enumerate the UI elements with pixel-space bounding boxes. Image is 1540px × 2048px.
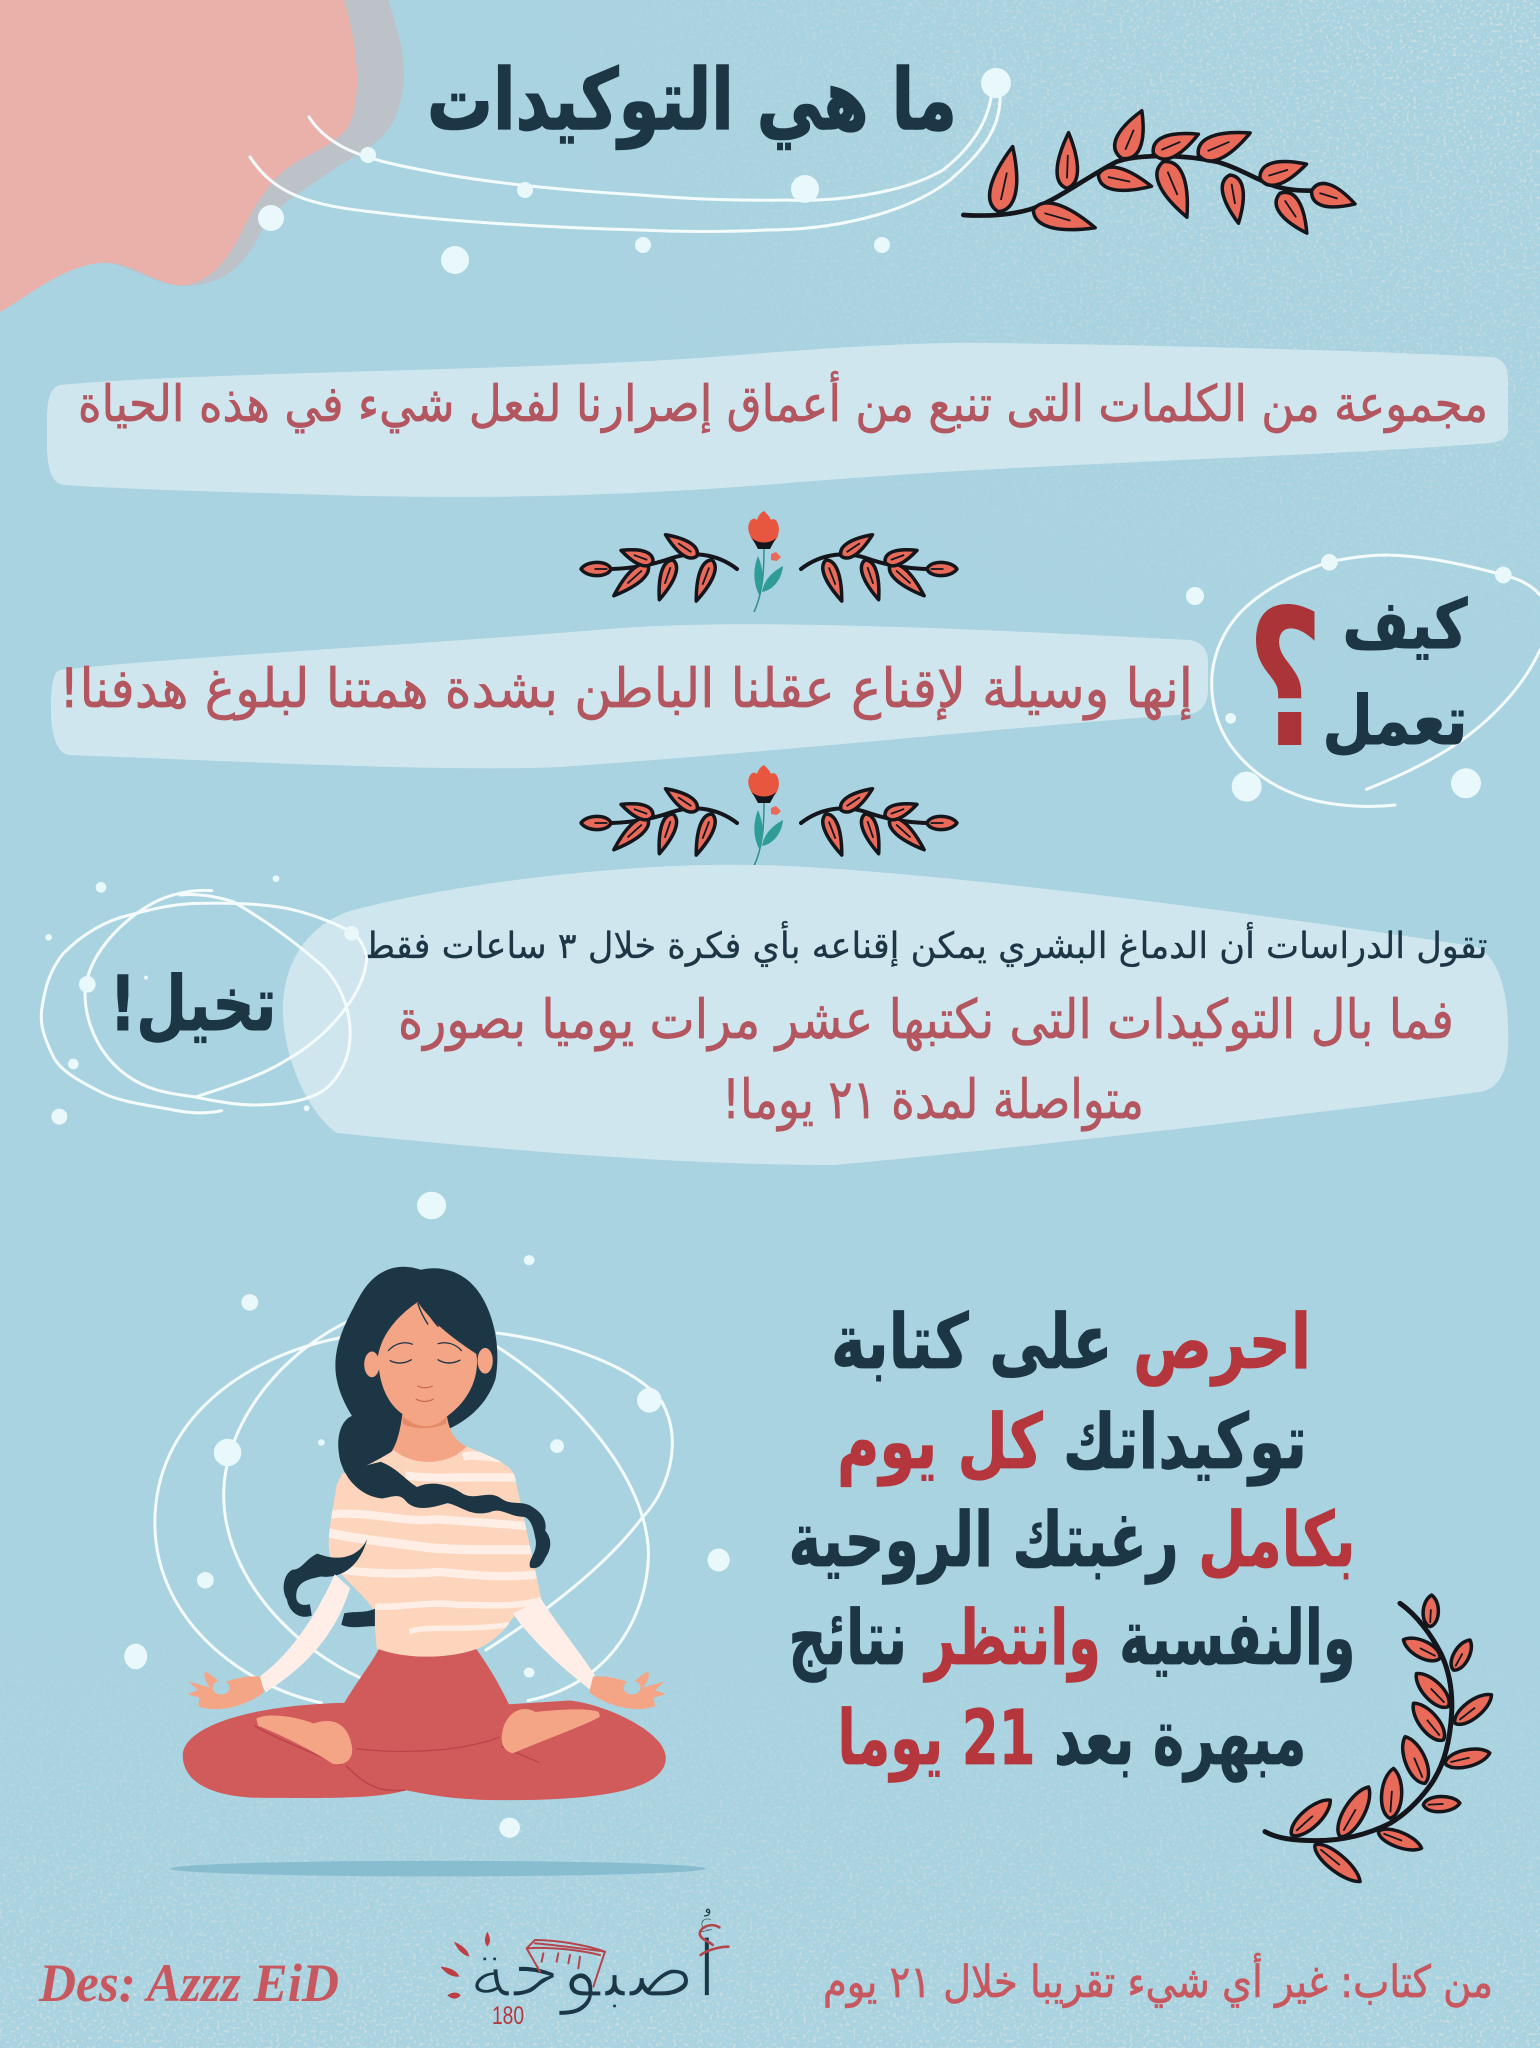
panel: how it works band [51, 624, 1208, 768]
hair [335, 1267, 497, 1498]
title: ما هي التوكيدات [427, 51, 957, 150]
logo [441, 1901, 728, 2030]
affirmation sentence line 2: متواصلة لمدة ٢١ يوما! [722, 1068, 1144, 1131]
neck [390, 1414, 467, 1465]
trouser folds [254, 1726, 539, 1791]
how it works text: إنها وسيلة لإقناع عقلنا الباطن بشدة همتنا لبلوغ هدفنا! [59, 657, 1193, 720]
advice line 1: احرص على كتابة [831, 1297, 1311, 1387]
right hand [589, 1672, 666, 1709]
logo sun rays [441, 1932, 490, 1999]
icon: flower ornament 2 [581, 765, 957, 866]
logo book and hamza [527, 1925, 728, 1987]
callout outline [41, 875, 367, 1125]
designer credit: Des: Azzz EiD [38, 1953, 339, 2013]
trousers [183, 1649, 666, 1800]
sleeves [258, 1574, 350, 1692]
facial features [388, 1302, 461, 1401]
heading: how: كيف [1342, 586, 1468, 665]
advice line 4: والنفسية وانتظر نتائج [788, 1593, 1356, 1683]
floating dots [124, 1192, 730, 1838]
advice line 5: مبهرة بعد 21 يوما [838, 1693, 1306, 1783]
logo small mark: و [704, 1901, 711, 1917]
ground shadow [170, 1861, 706, 1876]
title swirl lines and dots [250, 68, 1011, 274]
panel: imagine band [283, 865, 1508, 1165]
logo wordmark: أصبوحة [468, 1917, 718, 2017]
advice line 2: توكيداتك كل يوم [837, 1397, 1307, 1487]
callout: how does it work [1186, 554, 1540, 806]
illustration: meditating woman [124, 1192, 730, 1876]
study sentence: تقول الدراسات أن الدماغ البشري يمكن إقناعه بأي فكرة خلال ٣ ساعات فقط [362, 921, 1488, 967]
braid [284, 1462, 550, 1627]
callout outline [1212, 554, 1540, 806]
icon: lower branch [1265, 1595, 1497, 1888]
heading: imagine: تخيل! [110, 959, 276, 1048]
advice line 3: بكامل رغبتك الروحية [789, 1495, 1356, 1585]
callout: imagine [41, 875, 367, 1125]
text block: advice [788, 1297, 1356, 1783]
panel: definition band [47, 343, 1508, 497]
orbit lines [155, 1320, 672, 1703]
icon: top branch [963, 106, 1358, 239]
heading: works: تعمل [1322, 682, 1468, 761]
face [378, 1302, 477, 1422]
question mark: ؟ [1247, 569, 1323, 790]
shirt [329, 1447, 543, 1657]
hands [187, 1672, 264, 1709]
feet [256, 1709, 600, 1764]
logo number: 180 [492, 2002, 524, 2030]
ears [364, 1352, 380, 1377]
icon: flower ornament 1 [581, 511, 957, 612]
corner blob [0, 0, 404, 312]
